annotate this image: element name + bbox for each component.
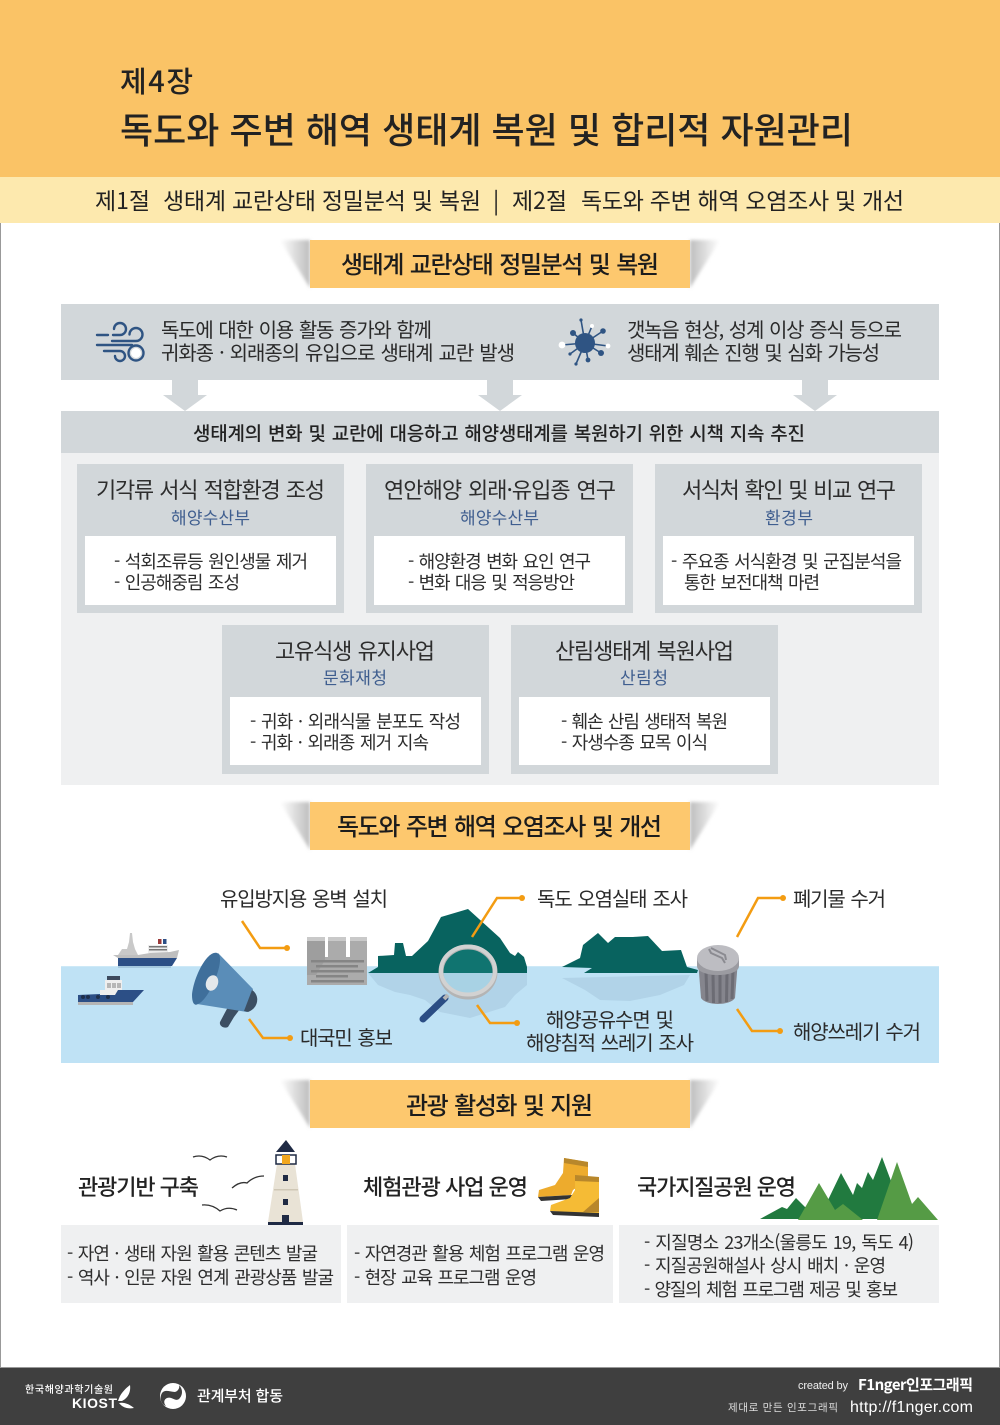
subheading strip: 생태계 교란상태 정밀분석 및 복원	[163, 182, 481, 216]
label: waste collection: 폐기물 수거	[793, 883, 886, 912]
label: containment wall: 유입방지용 옹벽 설치	[220, 883, 388, 912]
text box	[347, 1225, 613, 1303]
panel: national geopark	[619, 1157, 939, 1303]
icon: right island	[562, 933, 698, 973]
heading: ecosystem restoration: 생태계 교란상태 정밀분석 및 복원	[341, 245, 659, 280]
logo: KIOST: KIOST	[72, 1395, 117, 1411]
heading: tourism support: 관광 활성화 및 지원	[406, 1086, 593, 1121]
text: cause one	[161, 314, 515, 366]
card: native vegetation: 문화재청	[323, 664, 387, 689]
icon: virus	[559, 318, 610, 366]
card: native vegetation: - 귀화 · 외래식물 분포도 작성	[250, 708, 461, 734]
text box	[61, 1225, 341, 1303]
icon: large ship	[113, 933, 179, 968]
icon: mountains	[760, 1157, 938, 1220]
credit: created by	[798, 1380, 848, 1392]
label: sea debris survey: 해양공유수면 및	[546, 1004, 674, 1033]
card: coastal invasive species: - 해양환경 변화 요인 연구	[408, 548, 591, 574]
icon: magnifier	[423, 946, 495, 1019]
text box: - 양질의 체험 프로그램 제공 및 홍보	[644, 1276, 898, 1302]
icon: containment wall	[307, 937, 367, 985]
text: cause two	[627, 314, 902, 366]
leader: containment wall	[242, 921, 290, 951]
water	[61, 966, 939, 1063]
card: coastal invasive species: 해양수산부	[460, 504, 539, 529]
arrow: left	[163, 380, 207, 411]
card: coastal invasive species: - 변화 대응 및 적응방안	[408, 569, 575, 595]
heading: pollution survey: 독도와 주변 해역 오염조사 및 개선	[337, 807, 662, 842]
chapter title: 독도와 주변 해역 생태계 복원 및 합리적 자원관리	[120, 102, 853, 154]
text box: - 자연 · 생태 자원 활용 콘텐츠 발굴	[67, 1240, 318, 1266]
credit: F1nger인포그래픽	[858, 1374, 973, 1395]
heading: 관광기반 구축	[78, 1170, 199, 1202]
credit	[728, 1374, 973, 1416]
icon: birds	[193, 1156, 264, 1211]
logo: KIOST	[25, 1381, 134, 1411]
subheading strip	[0, 177, 1000, 223]
label: marine litter collection: 해양쓰레기 수거	[793, 1016, 921, 1045]
subheading strip: 제1절	[95, 182, 150, 216]
card: pinniped habitat: 기각류 서식 적합환경 조성	[96, 473, 325, 505]
label: public campaign: 대국민 홍보	[300, 1022, 393, 1051]
banner: policy statement	[61, 411, 939, 453]
card: pinniped habitat: 해양수산부	[171, 504, 250, 529]
icon: lighthouse	[268, 1140, 303, 1225]
footer	[0, 1367, 1000, 1425]
logo: government emblem	[160, 1383, 186, 1409]
leader: Dokdo survey	[472, 895, 525, 937]
text: cause two: 갯녹음 현상, 성계 이상 증식 등으로	[627, 314, 902, 343]
heading: 체험관광 사업 운영	[363, 1170, 528, 1202]
chapter number: 제4장	[120, 59, 193, 101]
arrow: centre	[478, 380, 522, 411]
heading: ecosystem restoration	[280, 240, 720, 288]
text box	[619, 1225, 939, 1303]
text: cause one: 귀화종 · 외래종의 유입으로 생태계 교란 발생	[161, 337, 515, 366]
leader: sea debris survey	[477, 1005, 520, 1026]
subheading strip: 제2절	[512, 182, 567, 216]
heading: tourism support	[280, 1080, 720, 1128]
subheading strip: 독도와 주변 해역 오염조사 및 개선	[581, 182, 904, 216]
heading: pollution survey	[280, 802, 720, 850]
leader: waste collection	[737, 895, 786, 937]
arrow: right	[793, 380, 837, 411]
card: native vegetation: 고유식생 유지사업	[275, 634, 435, 666]
label: sea debris survey	[526, 1004, 694, 1056]
logo: KIOST: 한국해양과학기술원	[25, 1381, 113, 1396]
heading: 국가지질공원 운영	[637, 1170, 796, 1202]
icon: megaphone	[192, 953, 257, 1028]
card: habitat comparison: - 주요종 서식환경 및 군집분석을	[671, 548, 902, 574]
card: habitat comparison: 서식처 확인 및 비교 연구	[682, 473, 896, 505]
card: forest restoration: 산림청	[620, 664, 668, 689]
banner: policy statement: 생태계의 변화 및 교란에 대응하고 해양생태계를 복원하기 위한 시책 지속 추진	[193, 419, 805, 446]
label: Dokdo survey: 독도 오염실태 조사	[537, 883, 688, 912]
credit: http://f1nger.com	[850, 1399, 973, 1416]
icon: left island	[368, 909, 527, 973]
panel: causes	[61, 304, 939, 380]
text box: - 역사 · 인문 자원 연계 관광상품 발굴	[67, 1264, 334, 1290]
icon: wind	[97, 323, 144, 361]
subheading strip: |	[493, 182, 499, 216]
label: sea debris survey: 해양침적 쓰레기 조사	[526, 1027, 694, 1056]
card: pinniped habitat: - 석회조류등 원인생물 제거	[114, 548, 308, 574]
text box: - 지질명소 23개소(울릉도 19, 독도 4)	[644, 1229, 914, 1255]
card: native vegetation	[222, 625, 489, 774]
card: habitat comparison: 통한 보전대책 마련	[684, 569, 820, 595]
text box: - 자연경관 활용 체험 프로그램 운영	[354, 1240, 605, 1266]
card: forest restoration: - 훼손 산림 생태적 복원	[561, 708, 728, 734]
card: forest restoration: - 자생수종 묘목 이식	[561, 729, 708, 755]
card: coastal invasive species: 연안해양 외래·유입종 연구	[384, 473, 616, 505]
panel: experience tourism	[347, 1158, 613, 1303]
card: pinniped habitat: - 인공해중림 조성	[114, 569, 240, 595]
panel: tourism infrastructure	[61, 1140, 341, 1303]
panel: pollution illustration	[61, 883, 939, 1063]
text: cause one: 독도에 대한 이용 활동 증가와 함께	[161, 314, 432, 343]
card: forest restoration	[511, 625, 778, 774]
leader: marine litter collection	[737, 1009, 783, 1034]
leader: public campaign	[249, 1019, 293, 1041]
icon: boots	[538, 1158, 599, 1217]
text box: - 현장 교육 프로그램 운영	[354, 1264, 537, 1290]
card: habitat comparison	[655, 464, 922, 613]
icon: tug boat	[78, 976, 144, 1005]
panel: policy measures	[61, 411, 939, 785]
panel: chapter header	[0, 0, 1000, 177]
text: joint ministries: 관계부처 합동	[197, 1385, 283, 1406]
icon: trash can	[697, 945, 739, 1004]
card: native vegetation: - 귀화 · 외래종 제거 지속	[250, 729, 429, 755]
text box: - 지질공원해설사 상시 배치 · 운영	[644, 1252, 886, 1278]
card: habitat comparison: 환경부	[765, 504, 813, 529]
card: pinniped habitat	[77, 464, 344, 613]
text: cause two: 생태계 훼손 진행 및 심화 가능성	[627, 337, 880, 366]
credit: 제대로 만든 인포그래픽	[728, 1400, 838, 1415]
card: coastal invasive species	[366, 464, 633, 613]
card: forest restoration: 산림생태계 복원사업	[555, 634, 734, 666]
